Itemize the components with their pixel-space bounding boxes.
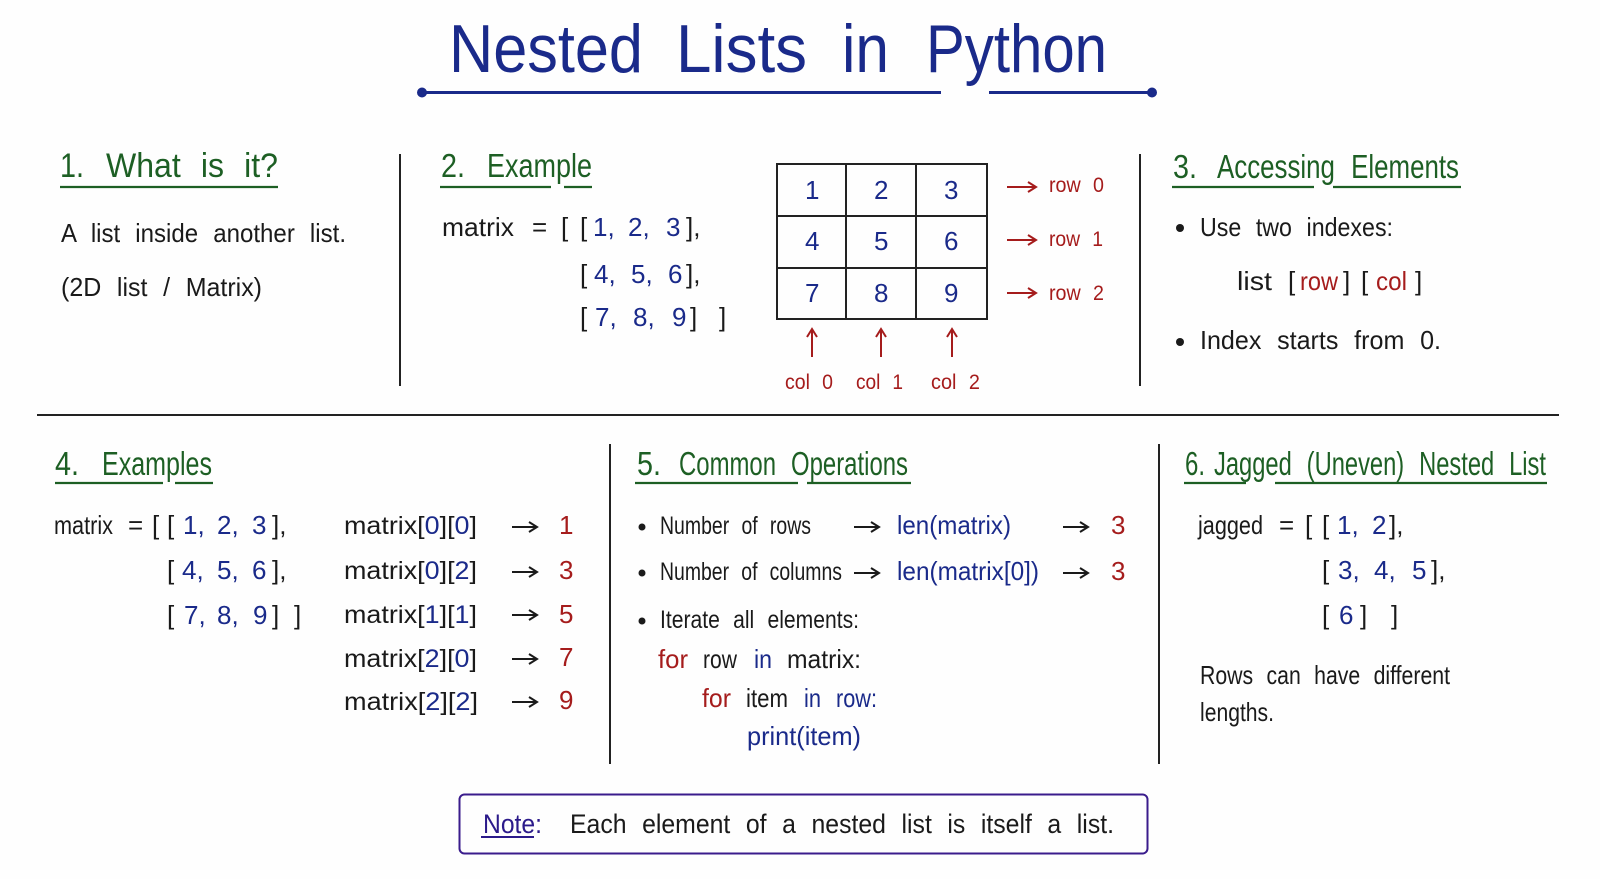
title: in [842,11,889,87]
code: jagged definition: [ [1322,555,1330,585]
operation: number of rows [638,510,1125,540]
text: definition: A list inside another list. [61,218,346,248]
code: jagged definition: 5 [1412,555,1426,585]
code: matrix definition: ], [272,555,286,585]
grid: 3x3 matrix [777,164,987,319]
heading: jagged nested list: 6. [1185,445,1205,482]
heading: example [440,147,592,187]
code: jagged definition: jagged [1197,510,1263,540]
panel: common operations [635,445,1125,751]
title: Nested [449,11,643,87]
code: matrix definition: 6 [252,555,266,585]
grid: 3x3 matrix: 6 [944,226,958,256]
example: matrix[2][2]: 9 [559,685,573,715]
column labels with arrows: col 0 [785,371,833,394]
heading: accessing elements: Accessing Elements [1217,148,1459,185]
code: matrix definition: ], [686,259,700,289]
code: matrix definition [442,212,726,332]
callout: note: Each element of a nested list is itself a list. [570,809,1114,839]
panel: example [440,147,1104,394]
code: nested for loop: matrix: [787,644,861,674]
code: list row col: list [1237,266,1273,296]
code: matrix definition: 4, [182,555,204,585]
operation: number of rows: Number of rows [660,512,811,540]
code: matrix definition: 2, [217,510,239,540]
code: matrix definition: [ [167,600,175,630]
code: jagged definition: = [1279,510,1294,540]
code: nested for loop: row [703,644,737,674]
code: matrix definition: ], [272,510,286,540]
code: jagged definition: ], [1431,555,1445,585]
operation: number of columns: Number of columns [660,558,842,586]
panel: what is it [60,147,346,302]
code: matrix definition: = [128,510,143,540]
code: nested for loop: item [746,683,788,713]
heading: example: Example [487,147,592,184]
operation: number of columns: 3 [1111,556,1125,586]
code: list row col [1237,266,1422,296]
bullet: use two indexes: Use two indexes: [1200,212,1393,242]
heading: accessing elements: 3. [1173,148,1197,185]
code: list row col: ] [1343,266,1350,296]
code: matrix definition: 3 [252,510,266,540]
code: jagged definition: [ [1322,600,1330,630]
panel: accessing elements [1172,148,1461,355]
code: matrix definition: 5, [217,555,239,585]
column labels with arrows: col 2 [931,371,980,394]
code: matrix definition: 5, [631,259,653,289]
code: jagged definition: 6 [1339,600,1353,630]
code: matrix definition: 4, [594,259,616,289]
example: matrix[1][1]: matrix[1][1] [344,601,477,629]
code: matrix definition: [ [152,510,160,540]
row labels with arrows: row 0 [1049,174,1104,197]
text: rows can differ: Rows can have different [1200,660,1451,690]
example: matrix[2][0]: matrix[2][0] [344,645,477,673]
callout: note: Note: [483,809,542,839]
code: list row col: row [1300,266,1338,296]
example: matrix[2][0] [344,642,573,673]
row labels with arrows [1007,174,1104,305]
code: nested for loop: for [658,644,688,674]
heading: examples [55,445,213,483]
heading: examples: 4. [55,445,79,482]
callout: note [460,794,1148,854]
text: definition: (2D list / Matrix) [61,272,262,302]
code: nested for loop: print(item) [747,721,861,751]
code: matrix definition: 9 [672,302,686,332]
code: matrix definition: 8, [217,600,239,630]
code: matrix definition: [ [580,259,588,289]
code: jagged definition: 2 [1372,510,1386,540]
code: jagged definition: [ [1305,510,1313,540]
example: matrix[0][2]: matrix[0][2] [344,557,477,585]
example: matrix[2][0]: 7 [559,642,573,672]
example: matrix[0][2]: 3 [559,555,573,585]
code: nested for loop [658,644,877,751]
code: matrix definition [54,510,301,630]
text: rows can differ [1200,660,1451,727]
example: matrix[0][0]: 1 [559,510,573,540]
code: jagged definition: 4, [1374,555,1396,585]
heading: example: 2. [441,147,465,184]
code: matrix definition: 1, [183,510,205,540]
code: matrix definition: [ [167,510,175,540]
code: matrix definition: 8, [633,302,655,332]
code: nested for loop: for [702,683,731,713]
code: matrix definition: [ [580,302,588,332]
example: matrix[0][0] [344,510,573,540]
code: list row col: [ [1288,266,1296,296]
example: matrix[0][2] [344,555,573,585]
title: Lists [676,11,807,87]
operation: number of rows: 3 [1111,510,1125,540]
code: list row col: col [1376,266,1407,296]
code: matrix definition: [ [561,212,569,242]
heading: what is it: 1. [60,147,84,185]
code: matrix definition: = [532,212,547,242]
code: matrix definition: ] [690,302,697,332]
grid: 3x3 matrix: 7 [805,278,819,308]
code: matrix definition: 1, [593,212,615,242]
column labels with arrows [785,329,980,394]
column labels with arrows: col 1 [856,371,903,394]
row labels with arrows: row 1 [1049,228,1103,251]
operation: iterate all elements: Iterate all elements: [660,606,859,634]
title [417,11,1157,98]
code: jagged definition: [ [1322,510,1330,540]
operation: number of rows: len(matrix) [897,510,1011,540]
code: nested for loop: row: [836,683,877,713]
grid: 3x3 matrix: 5 [874,226,888,256]
code: matrix definition: ] [272,600,279,630]
code: matrix definition: ] [719,302,726,332]
code: matrix definition: 7, [184,600,206,630]
code: matrix definition: matrix [442,212,514,242]
code: matrix definition: 2, [628,212,650,242]
code: jagged definition [1197,510,1445,630]
code: matrix definition: 7, [595,302,617,332]
code: jagged definition: ], [1389,510,1403,540]
code: matrix definition: ] [294,600,301,630]
heading: common operations: Common Operations [679,445,908,482]
operation: number of columns [638,556,1125,586]
example: matrix[0][0]: matrix[0][0] [344,512,477,540]
grid: 3x3 matrix: 8 [874,278,888,308]
code: matrix definition: 9 [253,600,267,630]
grid: 3x3 matrix: 9 [944,278,958,308]
code: matrix definition: matrix [54,510,113,540]
heading: common operations: 5. [637,445,661,482]
heading: examples: Examples [102,445,212,482]
example: matrix[2][2] [344,685,573,716]
panel: examples [54,445,573,716]
operation: number of columns: len(matrix[0]) [897,556,1039,586]
example: matrix[1][1]: 5 [559,599,573,629]
code: matrix definition: [ [580,212,588,242]
code: nested for loop: in [804,683,821,713]
grid: 3x3 matrix: 4 [805,226,819,256]
code: list row col: [ [1361,266,1369,296]
row labels with arrows: row 2 [1049,282,1104,305]
example: matrix[2][2]: matrix[ 2][2] [344,688,478,716]
text: rows can differ: lengths. [1200,697,1274,727]
code: matrix definition: 3 [666,212,680,242]
code: jagged definition: ] [1360,600,1367,630]
bullet: index starts from 0: Index starts from 0. [1200,325,1441,355]
code: matrix definition: 6 [668,259,682,289]
example: matrix[1][1] [344,599,573,629]
grid: 3x3 matrix: 2 [874,175,888,205]
heading: common operations [635,445,911,483]
code: list row col: ] [1415,266,1422,296]
heading: what is it: What is it? [106,147,278,185]
panel: jagged nested list [1184,445,1547,727]
text: definition [61,218,346,302]
code: jagged definition: 3, [1338,555,1360,585]
code: matrix definition: ], [686,212,700,242]
grid: 3x3 matrix: 1 [805,175,819,205]
heading: accessing elements [1172,148,1461,187]
code: nested for loop: in [754,644,772,674]
grid: 3x3 matrix: 3 [944,175,958,205]
code: matrix definition: [ [167,555,175,585]
title: Python [926,11,1107,87]
code: jagged definition: ] [1391,600,1398,630]
code: jagged definition: 1, [1337,510,1359,540]
